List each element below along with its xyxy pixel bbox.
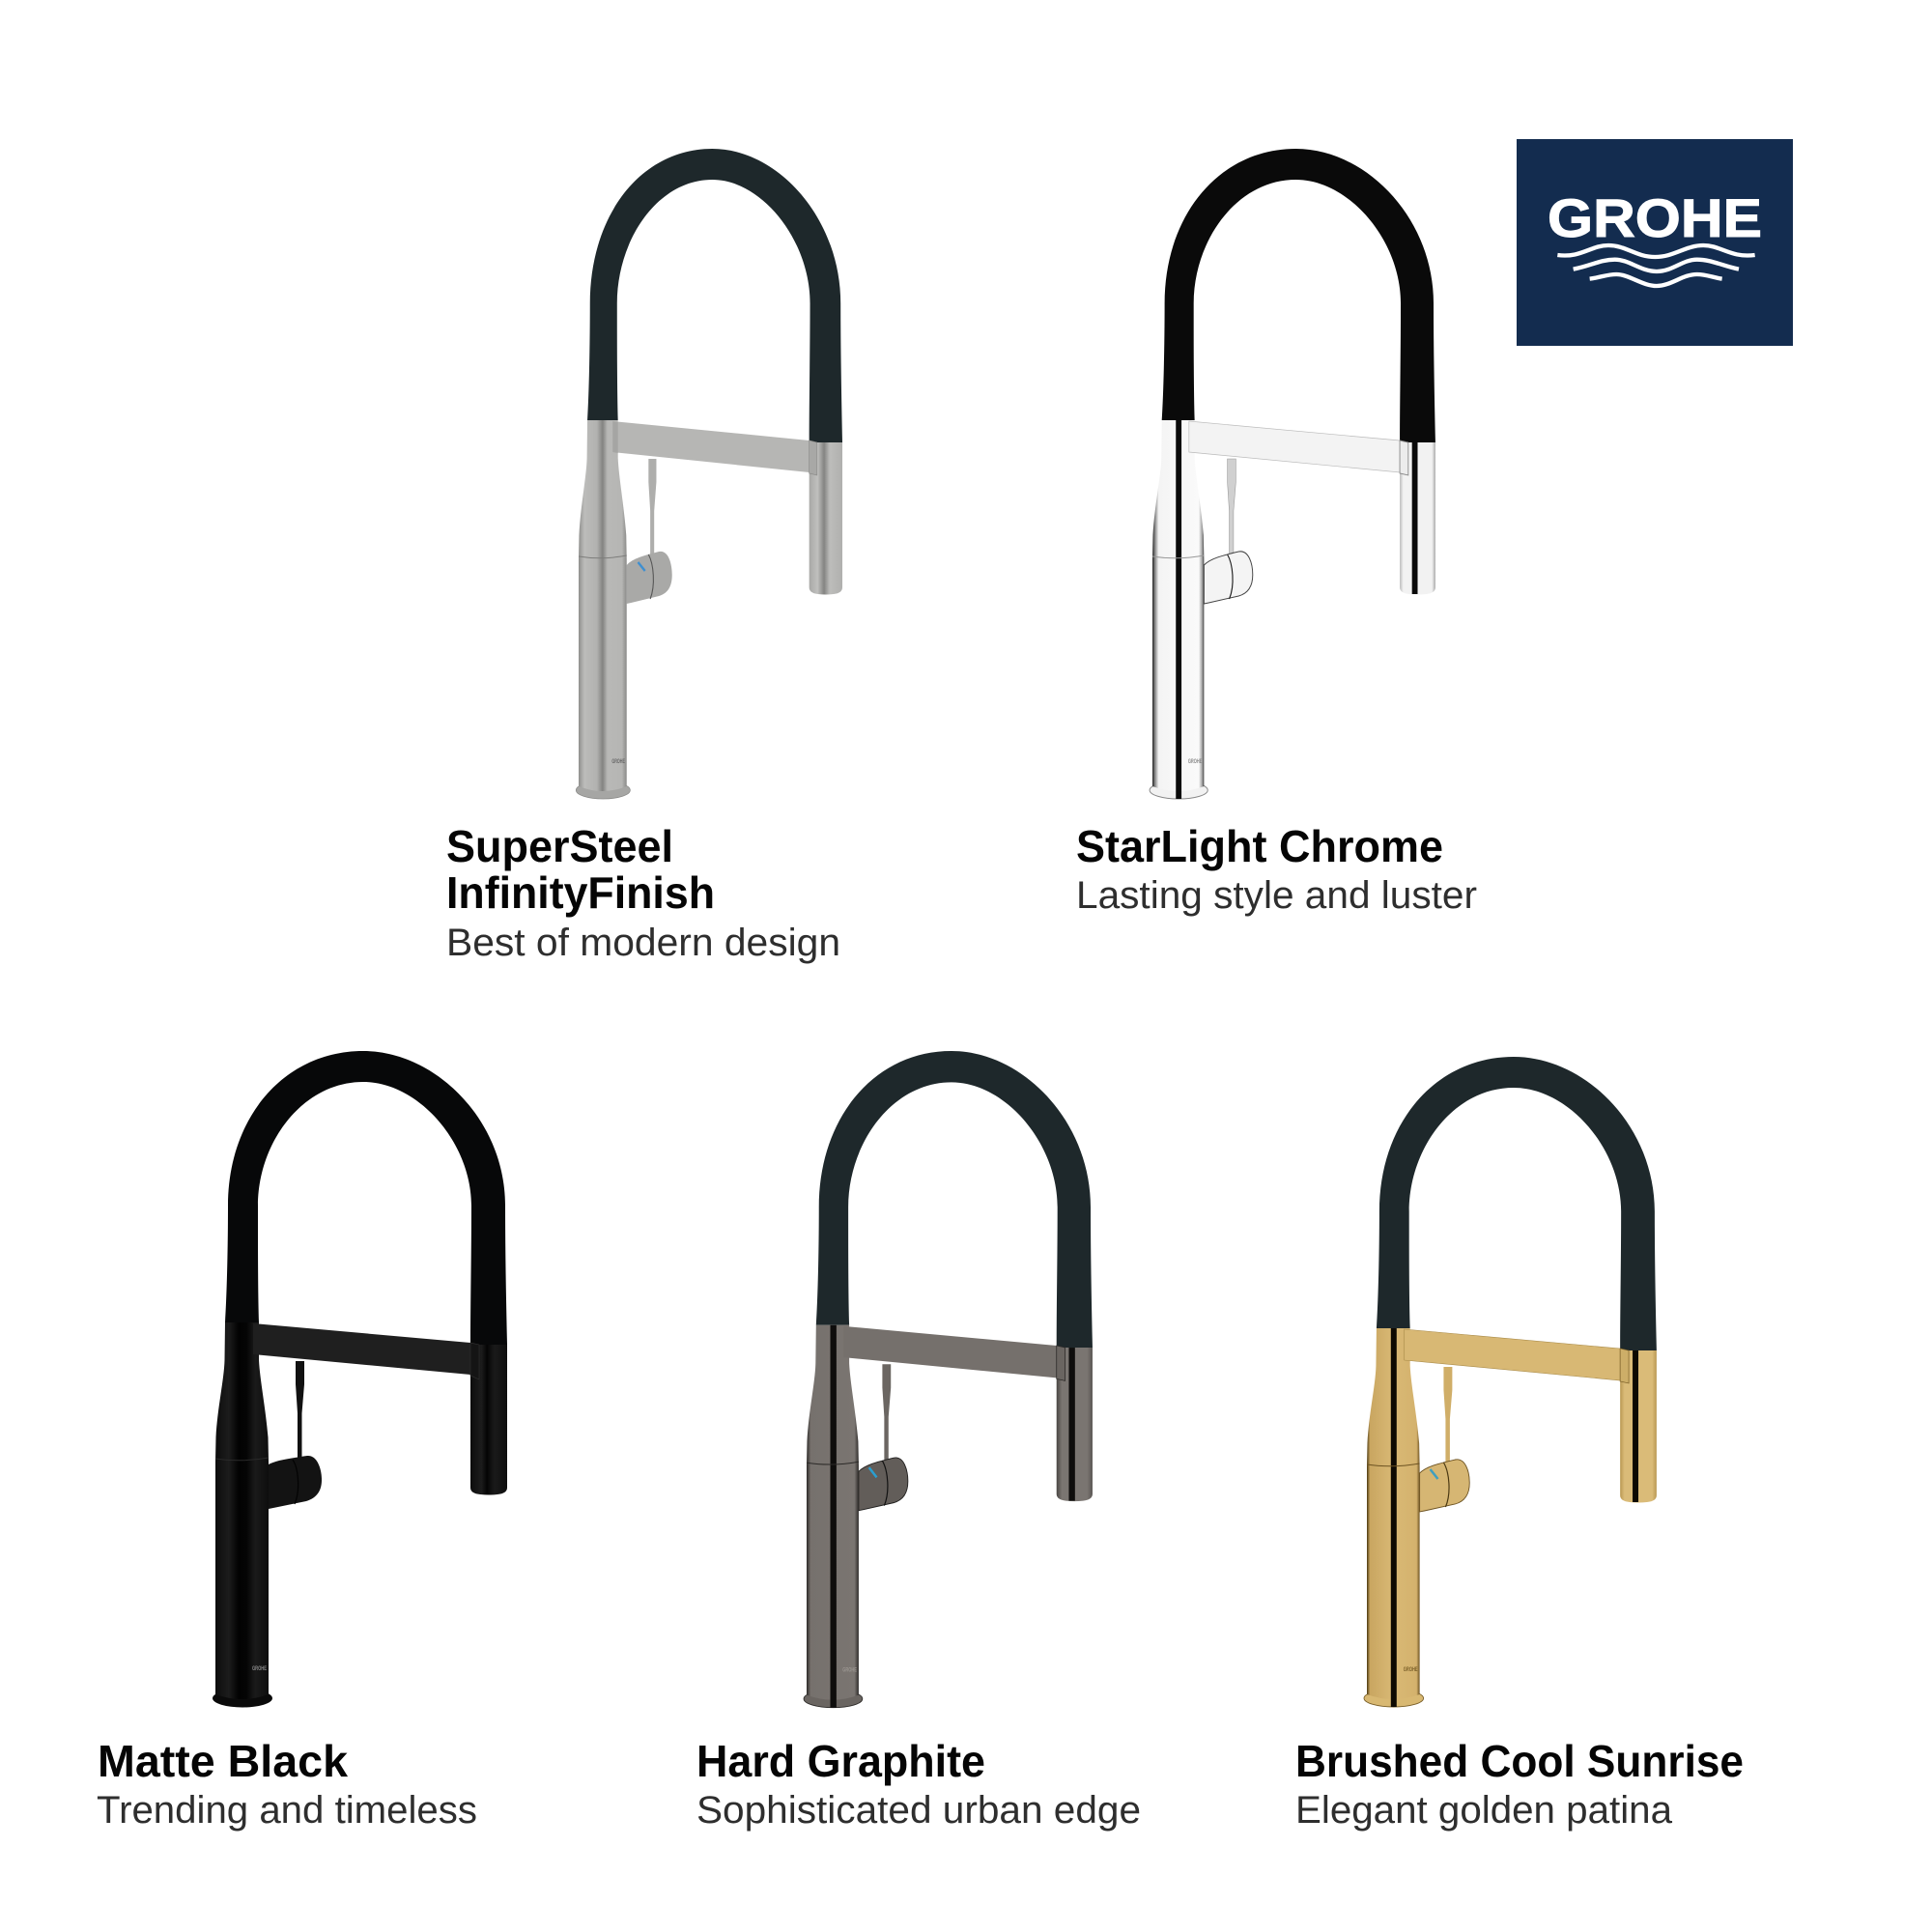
- body: [1367, 1328, 1420, 1699]
- bar bracket: [470, 1343, 479, 1379]
- hose: [225, 1051, 507, 1345]
- description: Elegant golden patina: [1295, 1789, 1673, 1832]
- bar bracket: [1620, 1349, 1629, 1383]
- bar end: [612, 421, 618, 453]
- temperature mark: [1431, 1469, 1437, 1479]
- handle: [1420, 1460, 1469, 1512]
- base logo: GROHE: [1188, 759, 1202, 765]
- finish name: StarLight Chrome: [1076, 821, 1443, 871]
- sprayer: [1057, 1348, 1093, 1501]
- temperature mark: [638, 562, 645, 571]
- handle: [859, 1458, 908, 1511]
- sprayer: [810, 442, 842, 595]
- spout bar: [612, 421, 810, 472]
- handle seam: [1228, 554, 1233, 599]
- bar bracket: [810, 440, 817, 475]
- body seam: [1367, 1463, 1420, 1466]
- caption: Brushed Cool Sunrise: [1295, 1736, 1744, 1832]
- body seam: [579, 555, 627, 558]
- flange: [804, 1690, 863, 1708]
- handle seam: [1443, 1463, 1449, 1507]
- handle: [1204, 552, 1253, 604]
- handle: [269, 1456, 322, 1509]
- handle seam: [882, 1461, 888, 1506]
- body: [215, 1322, 269, 1699]
- body: [1152, 420, 1204, 791]
- body seam: [1152, 555, 1204, 558]
- sprayer reflection: [1068, 1348, 1075, 1501]
- caption: Matte Black: [97, 1736, 477, 1832]
- handle seam: [648, 554, 653, 599]
- description: Trending and timeless: [97, 1789, 477, 1832]
- bar bracket: [1057, 1346, 1065, 1380]
- caption: StarLight Chrome: [1076, 821, 1477, 917]
- body seam: [215, 1458, 269, 1461]
- lever: [882, 1364, 891, 1463]
- faucet: Matte Black: [213, 1051, 507, 1708]
- finish name: Matte Black: [98, 1736, 348, 1786]
- finish name: Brushed Cool Sunrise: [1295, 1736, 1744, 1786]
- lever: [1443, 1367, 1452, 1464]
- finish name: SuperSteel: [446, 821, 673, 871]
- description: Sophisticated urban edge: [696, 1789, 1141, 1832]
- body seam: [807, 1462, 859, 1464]
- lever: [296, 1361, 304, 1459]
- finish name: Hard Graphite: [696, 1736, 985, 1786]
- flange: [213, 1689, 272, 1708]
- base logo: GROHE: [252, 1666, 267, 1672]
- logo background: [1517, 139, 1793, 346]
- body reflection: [831, 1325, 837, 1708]
- spout bar: [253, 1323, 470, 1375]
- spout bar: [843, 1326, 1057, 1378]
- faucet: SuperSteel: [576, 149, 842, 799]
- hose: [816, 1051, 1093, 1348]
- sprayer: [470, 1345, 507, 1495]
- description: Lasting style and luster: [1076, 874, 1477, 917]
- base logo: GROHE: [1404, 1667, 1418, 1673]
- flange: [576, 781, 630, 799]
- lever: [1228, 459, 1236, 556]
- temperature mark: [869, 1467, 877, 1477]
- base logo: GROHE: [842, 1667, 857, 1673]
- body: [807, 1325, 859, 1700]
- bar bracket: [1400, 440, 1408, 475]
- flange: [1364, 1690, 1424, 1707]
- description: Best of modern design: [446, 922, 840, 964]
- finish name line 2: InfinityFinish: [446, 867, 715, 918]
- hose: [1377, 1057, 1657, 1350]
- caption: Hard Graphite: [696, 1736, 1141, 1832]
- logo waves: [1557, 245, 1755, 286]
- faucet: Brushed Cool Sunrise: [1364, 1057, 1657, 1707]
- logo wordmark: GROHE: [1548, 187, 1762, 248]
- sprayer: [1400, 442, 1435, 595]
- body reflection: [1176, 420, 1181, 799]
- spout bar: [1189, 421, 1400, 472]
- sprayer reflection: [1412, 442, 1418, 594]
- base logo: GROHE: [611, 759, 625, 765]
- body: [579, 420, 627, 791]
- lever: [648, 459, 656, 556]
- handle: [627, 552, 672, 604]
- caption: SuperSteel InfinityFinish: [446, 821, 840, 964]
- faucet: StarLight Chrome: [1150, 149, 1435, 799]
- hose: [1162, 149, 1435, 442]
- handle seam: [293, 1460, 298, 1504]
- flange: [1150, 781, 1208, 799]
- sprayer: [1620, 1350, 1657, 1503]
- spout bar: [1405, 1329, 1620, 1380]
- body reflection: [1391, 1328, 1397, 1707]
- hose: [587, 149, 842, 442]
- logo: GROHE: [1517, 139, 1793, 346]
- sprayer reflection: [1633, 1350, 1638, 1502]
- faucet: Hard Graphite: [804, 1051, 1093, 1708]
